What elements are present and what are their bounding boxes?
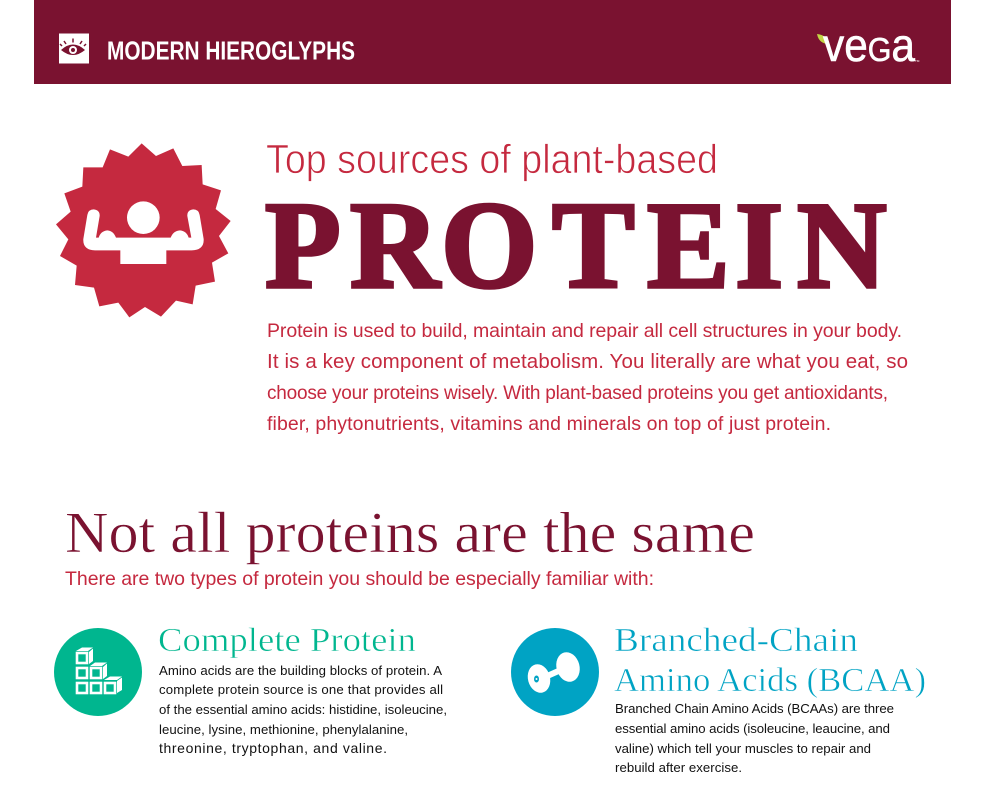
intro paragraph: It is a key component of metabolism. You literally are what you eat, so xyxy=(267,350,908,373)
panel: branched-chain amino acids xyxy=(511,622,926,775)
text: complete protein description: leucine, lysine, methionine, phenylalanine, xyxy=(159,722,408,737)
text: complete protein description: complete protein source is one that provides all xyxy=(159,682,443,697)
text: complete protein description: threonine, tryptophan, and valine. xyxy=(159,740,387,756)
icon: stacked blocks xyxy=(54,628,142,716)
icon: strong person badge xyxy=(56,143,231,317)
vega logo: TM xyxy=(915,59,920,63)
intro paragraph: Protein is used to build, maintain and repair all cell structures in your body. xyxy=(267,320,902,342)
panel: complete protein xyxy=(54,622,447,756)
text: BCAA description: Branched Chain Amino Acids (BCAAs) are three xyxy=(615,701,894,716)
title: PROTEIN: PROTEIN xyxy=(265,177,887,314)
brand name: MODERN HIEROGLYPHS xyxy=(107,36,355,66)
icon: eye logo xyxy=(59,34,89,64)
text: BCAA description: rebuild after exercise. xyxy=(615,760,742,775)
text: BCAA description xyxy=(615,701,894,775)
icon: dumbbell xyxy=(511,628,599,716)
heading: branched-chain amino acids xyxy=(614,622,926,699)
heading: branched-chain amino acids: Branched-Chain xyxy=(614,622,858,659)
intro paragraph: fiber, phytonutrients, vitamins and minerals on top of just protein. xyxy=(267,413,831,435)
text: complete protein description: Amino acids are the building blocks of protein. A xyxy=(159,663,442,678)
text: BCAA description: valine) which tell your muscles to repair and xyxy=(615,741,871,756)
intro paragraph xyxy=(267,320,908,435)
heading: branched-chain amino acids: Amino Acids (BCAA) xyxy=(614,662,926,699)
text: complete protein description xyxy=(159,663,447,756)
text: complete protein description: of the essential amino acids: histidine, isoleucine, xyxy=(159,702,447,717)
header banner xyxy=(34,0,951,84)
heading: complete protein: Complete Protein xyxy=(158,622,416,659)
intro paragraph: choose your proteins wisely. With plant-based proteins you get antioxidants, xyxy=(267,383,888,404)
section subheading: There are two types of protein you should be especially familiar with: xyxy=(65,568,654,590)
title intro line: Top sources of plant-based xyxy=(266,136,718,182)
section heading: Not all proteins are the same xyxy=(65,500,755,565)
text: BCAA description: essential amino acids (isoleucine, leaucine, and xyxy=(615,721,890,736)
vega logo: veGa xyxy=(823,19,915,71)
